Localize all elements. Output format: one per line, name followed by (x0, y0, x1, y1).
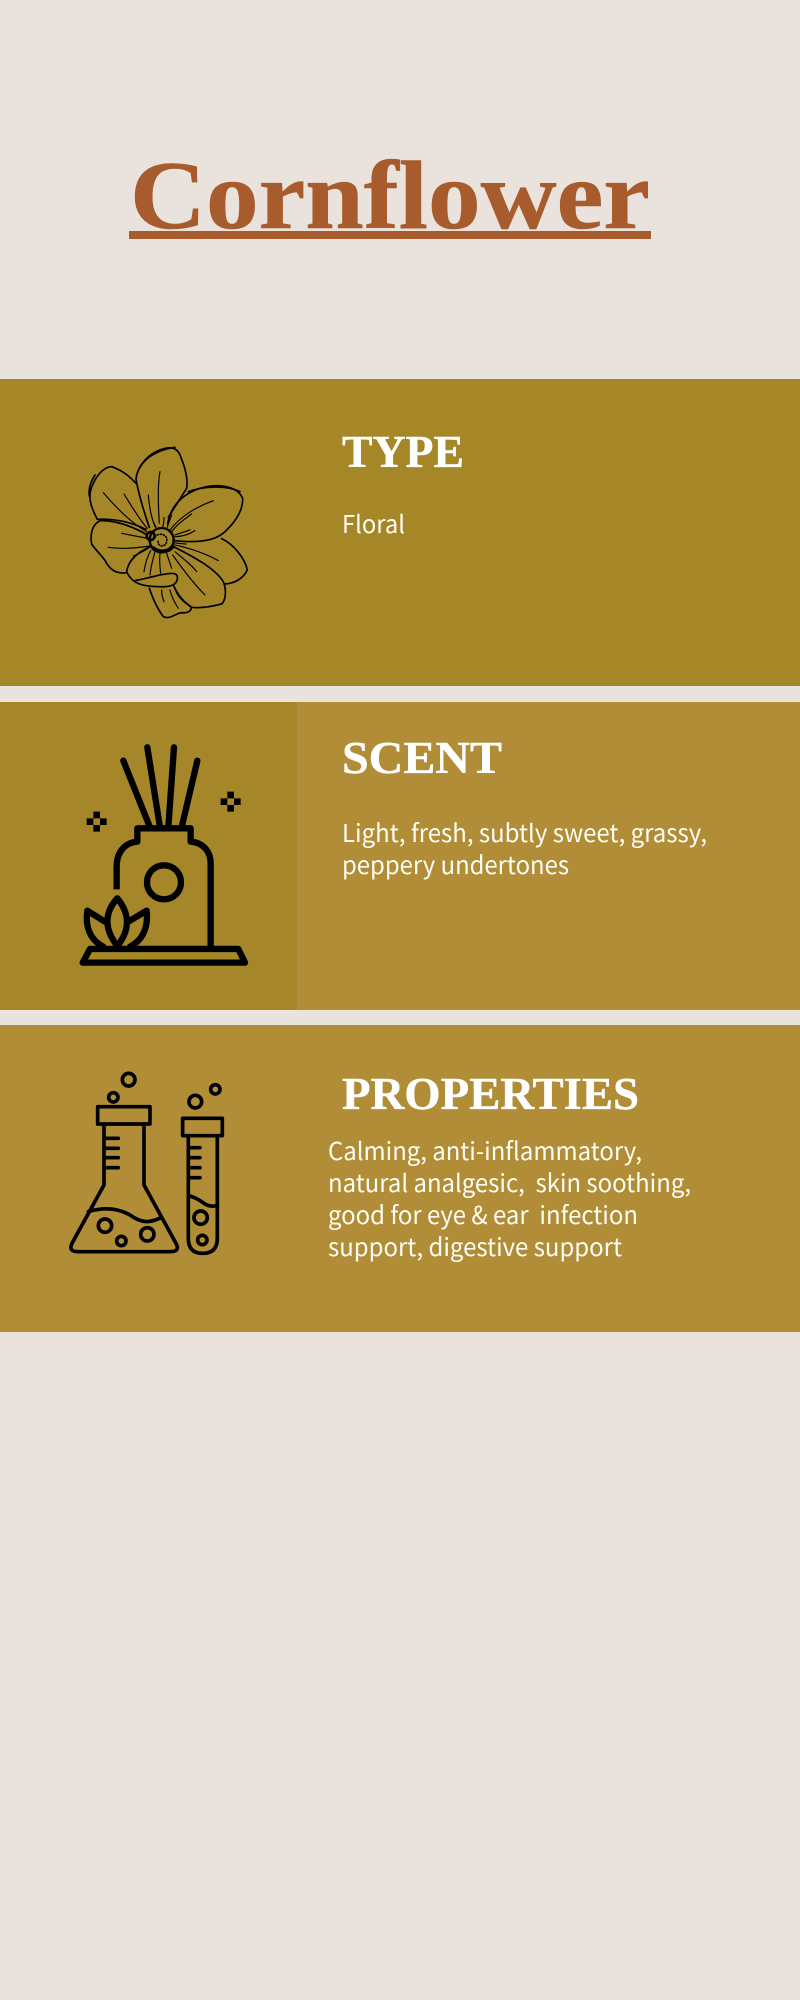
text: properties description: natural analgesic, skin soothing, (328, 1165, 691, 1200)
panel: scent (0, 702, 800, 1010)
heading: type: TYPE (342, 427, 464, 477)
icon: flower (89, 447, 247, 618)
text: properties description: support, digestive support (328, 1229, 622, 1264)
text: properties description: Calming, anti-inflammatory, (328, 1133, 642, 1168)
title: Cornflower (130, 142, 650, 250)
heading: scent: SCENT (342, 733, 502, 783)
text: scent description: Light, fresh, subtly sweet, grassy, (342, 815, 707, 850)
text: scent description (342, 815, 707, 882)
text: properties description (328, 1133, 691, 1264)
icon: lab flask and test tube (71, 1073, 222, 1253)
text: type value: Floral (342, 506, 405, 541)
text: scent description: peppery undertones (342, 847, 569, 882)
panel: properties (0, 1025, 800, 1332)
heading: properties: PROPERTIES (342, 1069, 639, 1119)
text: properties description: good for eye & ear infection (328, 1197, 638, 1232)
icon: reed diffuser (83, 747, 245, 963)
panel: type (0, 379, 800, 686)
